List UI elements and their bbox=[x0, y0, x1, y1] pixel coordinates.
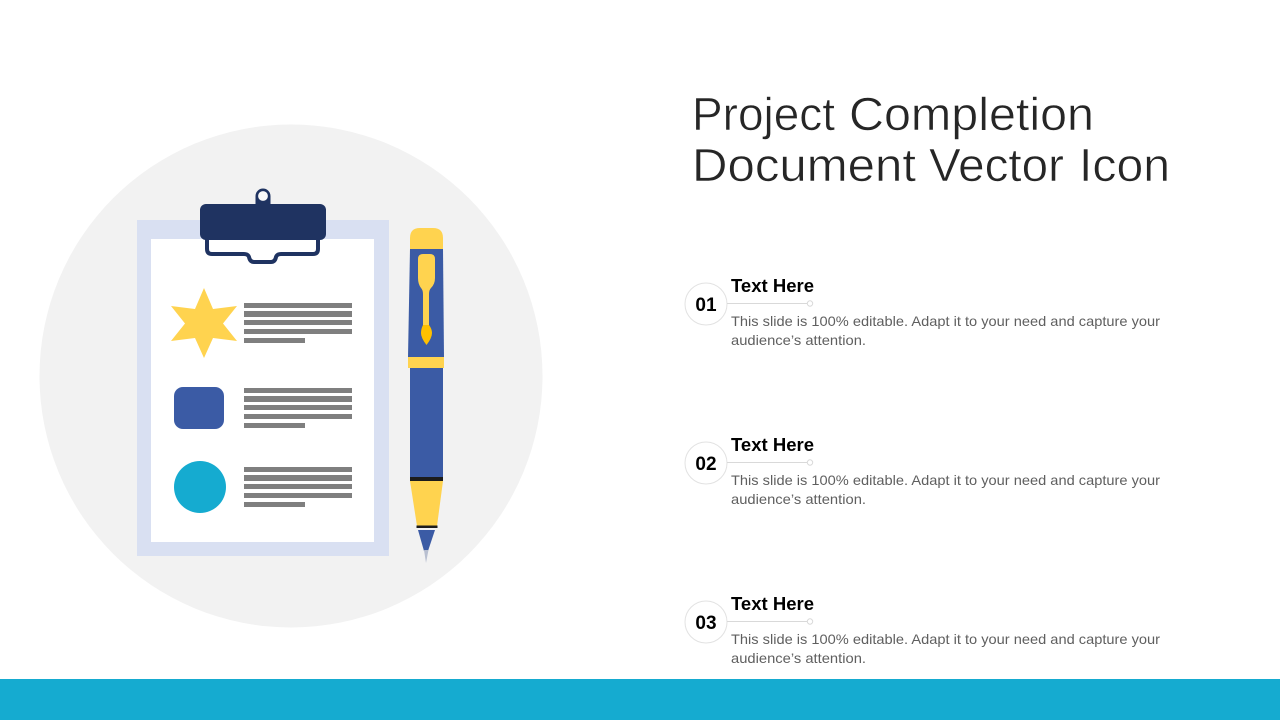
body 03 bbox=[731, 631, 1160, 666]
body 02 bbox=[731, 472, 1160, 507]
title: Icon bbox=[1079, 139, 1170, 191]
body 03: This slide is 100% editable. Adapt it to your need and capture your bbox=[731, 631, 1160, 647]
pen clip bulb bbox=[421, 325, 432, 345]
text lines 1 bbox=[244, 303, 352, 343]
icon: teal circle bbox=[174, 461, 226, 513]
body 03: audience’s attention. bbox=[731, 650, 866, 666]
icon: pen bbox=[408, 228, 444, 563]
background circle bbox=[40, 124, 542, 628]
pen tip bbox=[424, 550, 428, 563]
item 03 bbox=[685, 594, 1160, 666]
number badge 03: 03 bbox=[695, 613, 717, 634]
text lines 2 bbox=[244, 388, 352, 428]
body 01: audience’s attention. bbox=[731, 332, 866, 348]
body 02: audience’s attention. bbox=[731, 491, 866, 507]
heading 01: Text Here bbox=[731, 276, 814, 296]
connector 02 bbox=[727, 460, 813, 465]
title: Document bbox=[692, 139, 916, 191]
title: Project bbox=[692, 88, 835, 140]
body 01: This slide is 100% editable. Adapt it to your need and capture your bbox=[731, 313, 1160, 329]
pen band bbox=[408, 357, 444, 368]
number badge 03 bbox=[685, 601, 727, 643]
pen grip bbox=[410, 481, 443, 526]
pen nib bbox=[418, 530, 435, 551]
icon: clip bbox=[200, 190, 326, 262]
text lines 3 bbox=[244, 467, 352, 507]
icon: yellow star bbox=[171, 288, 237, 358]
pen grip ring bbox=[416, 526, 438, 528]
bottom bar bbox=[0, 679, 1280, 720]
title bbox=[692, 88, 1170, 191]
pen upper body bbox=[408, 249, 444, 357]
icon: blue rounded square bbox=[174, 387, 224, 429]
pen cap top bbox=[410, 228, 443, 249]
number badge 02 bbox=[685, 442, 727, 484]
clipboard paper bbox=[151, 239, 374, 542]
item 02 bbox=[685, 435, 1160, 507]
pen black ring bbox=[410, 477, 443, 481]
heading 03: Text Here bbox=[731, 594, 814, 614]
icon: clipboard bbox=[137, 190, 389, 556]
body 01 bbox=[731, 313, 1160, 348]
title: Vector bbox=[929, 139, 1064, 191]
body 02: This slide is 100% editable. Adapt it to your need and capture your bbox=[731, 472, 1160, 488]
heading 02: Text Here bbox=[731, 435, 814, 455]
pen barrel bbox=[410, 368, 443, 478]
connector 03 bbox=[727, 619, 813, 624]
number badge 02: 02 bbox=[695, 454, 717, 475]
pen clip bbox=[418, 254, 435, 326]
clipboard board bbox=[137, 220, 389, 556]
number badge 01: 01 bbox=[695, 295, 717, 316]
number badge 01 bbox=[685, 283, 727, 325]
item 01 bbox=[685, 276, 1160, 348]
title: Completion bbox=[849, 88, 1094, 140]
connector 01 bbox=[727, 301, 813, 306]
